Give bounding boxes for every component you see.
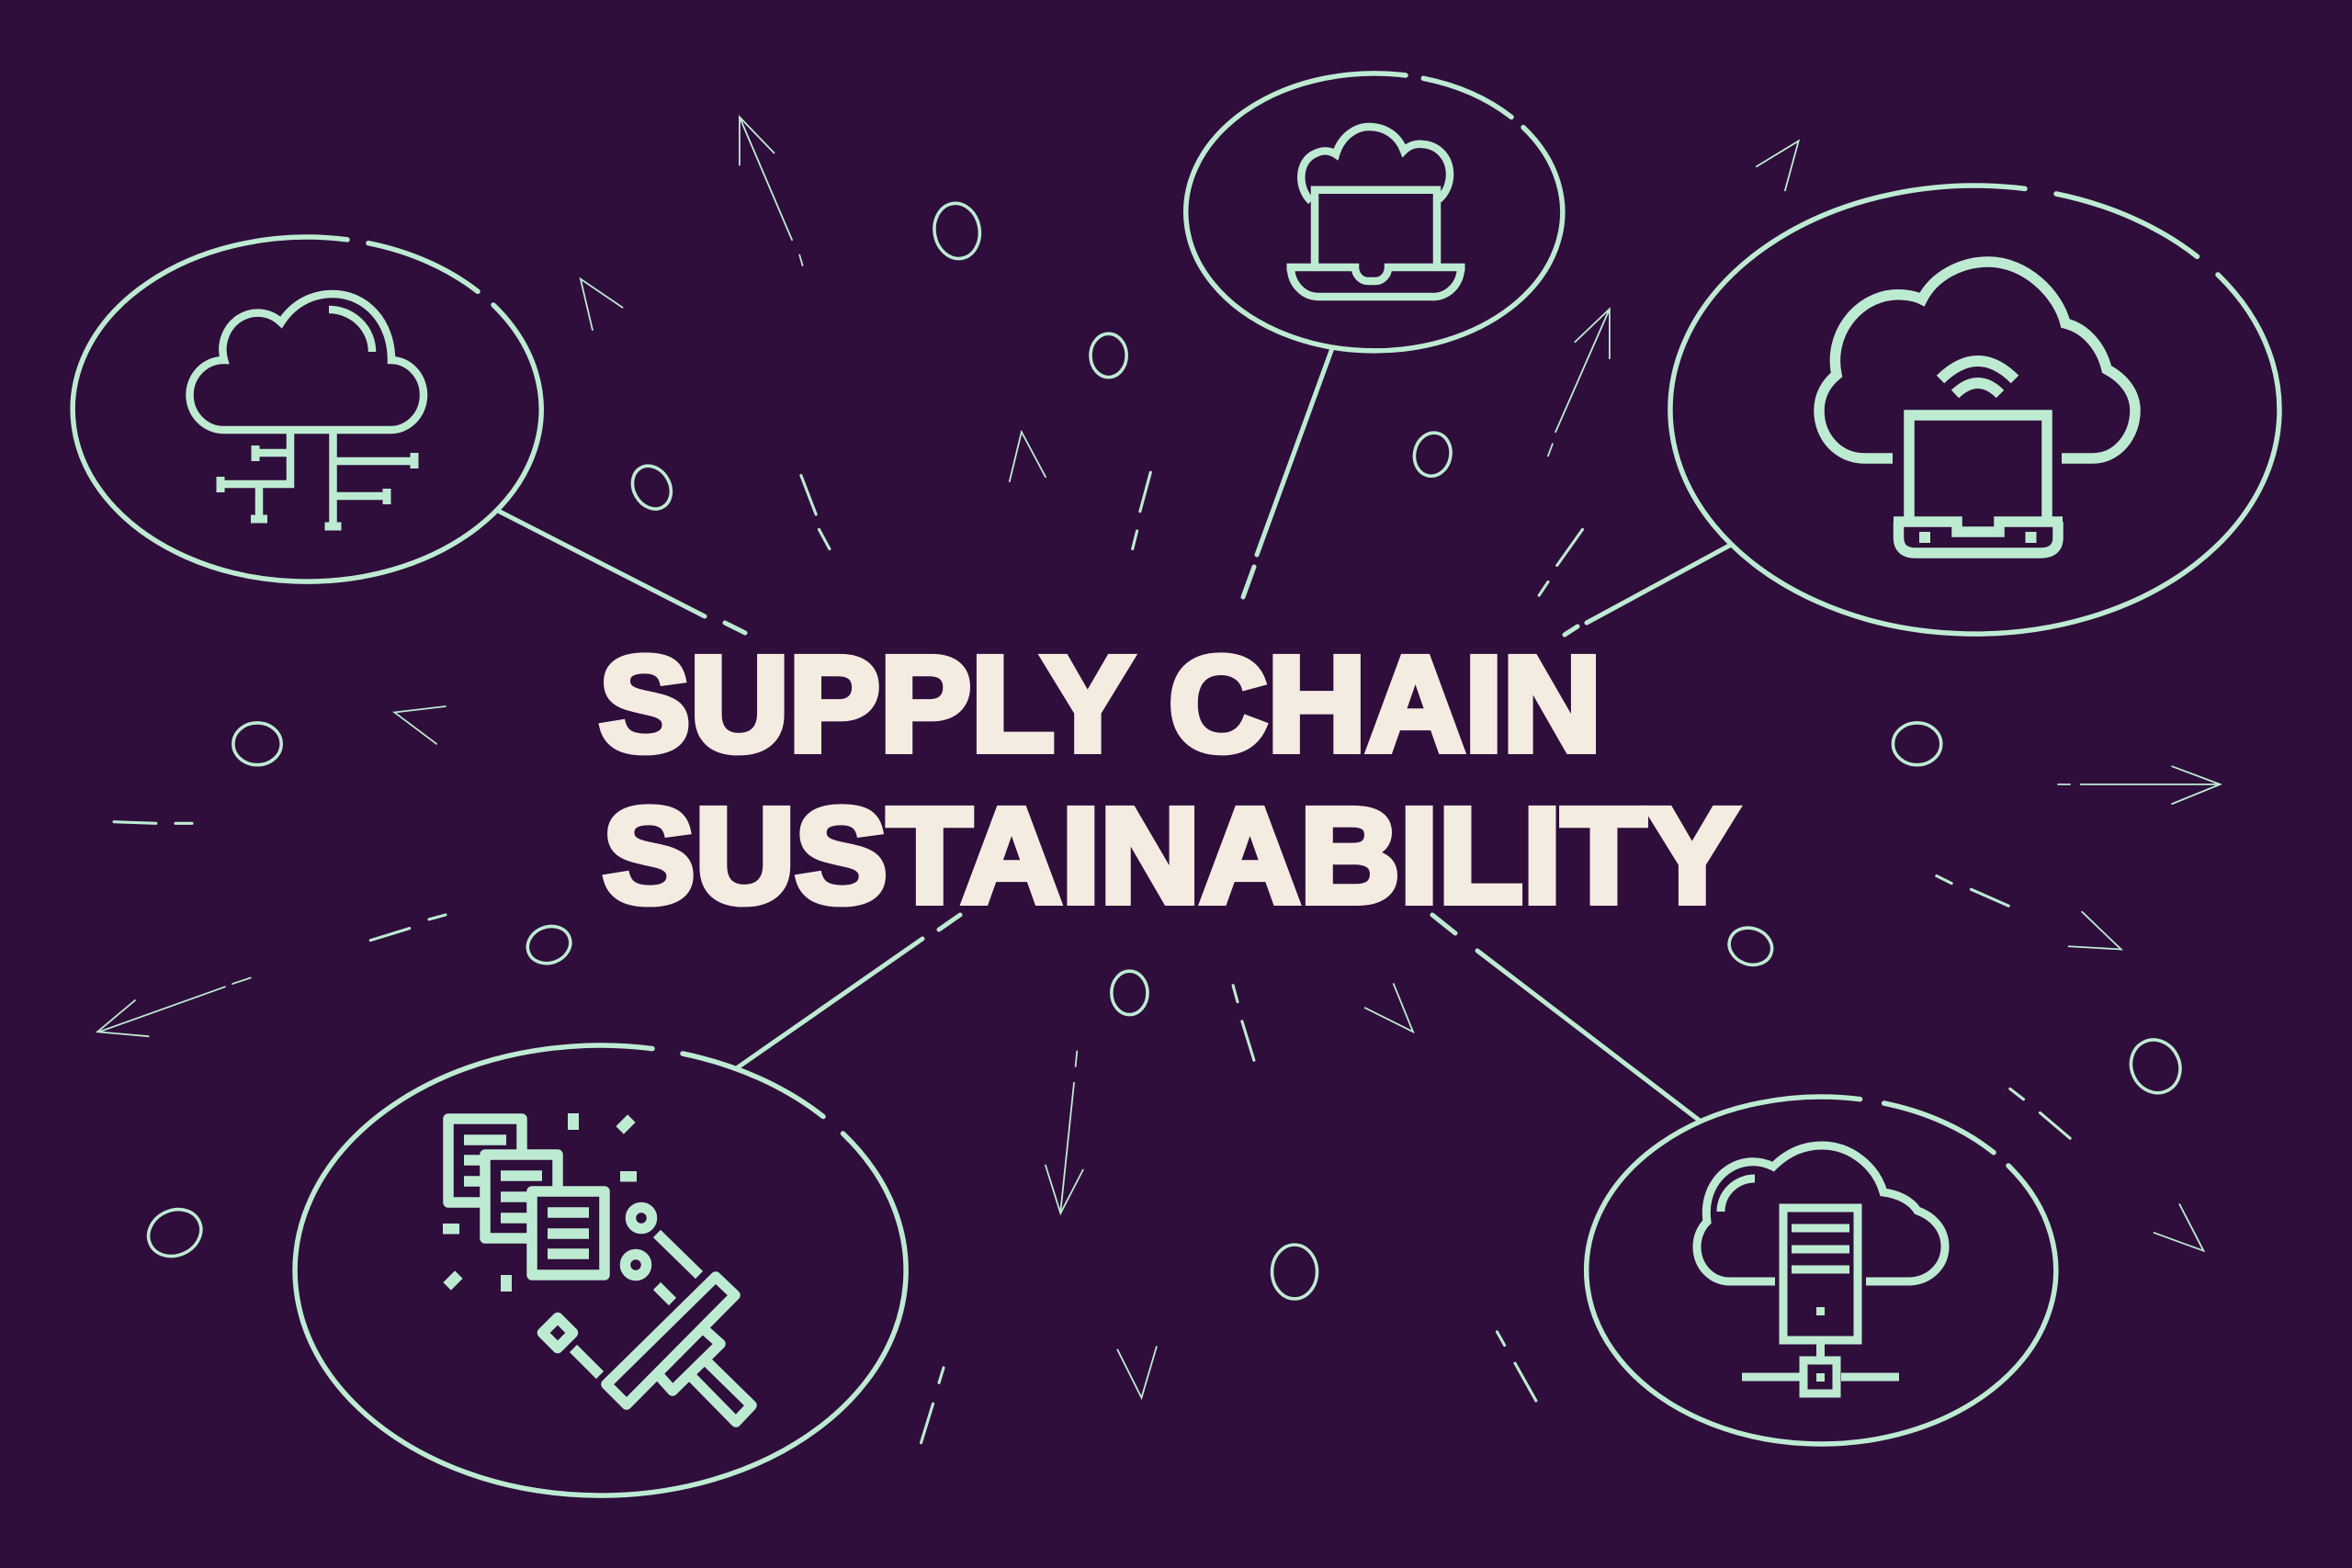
title: SUSTAINABILITY (603, 781, 1738, 931)
title (599, 629, 1738, 931)
bubble: cloud server (1587, 1097, 2056, 1444)
bubble outline (1670, 186, 2279, 634)
icon: cloud server network (1697, 1145, 1945, 1393)
bubble: document squeegee (295, 1045, 906, 1495)
bubble outline (73, 237, 541, 581)
bubble outline (1186, 73, 1563, 351)
bubble: cloud laptop (1186, 73, 1563, 351)
thin arrows (97, 117, 2220, 1213)
small chevrons (394, 141, 2203, 1398)
bubble: cloud wifi laptop (1670, 186, 2279, 634)
icon: documents being cleaned by squeegee (443, 1113, 752, 1422)
scattered decorative circles (141, 199, 2188, 1299)
icon: cloud, wifi and laptop (1819, 262, 2135, 553)
icon: laptop under cloud (1286, 127, 1464, 297)
scattered dashes (114, 472, 2070, 1443)
bubble outline (1587, 1097, 2056, 1444)
title: SUPPLY CHAIN (599, 629, 1601, 780)
icon: cloud with circuit (190, 294, 424, 526)
bubble outline (295, 1045, 906, 1495)
connector lines from title to bubbles (500, 348, 1731, 1121)
bubble: cloud circuit (73, 237, 541, 581)
